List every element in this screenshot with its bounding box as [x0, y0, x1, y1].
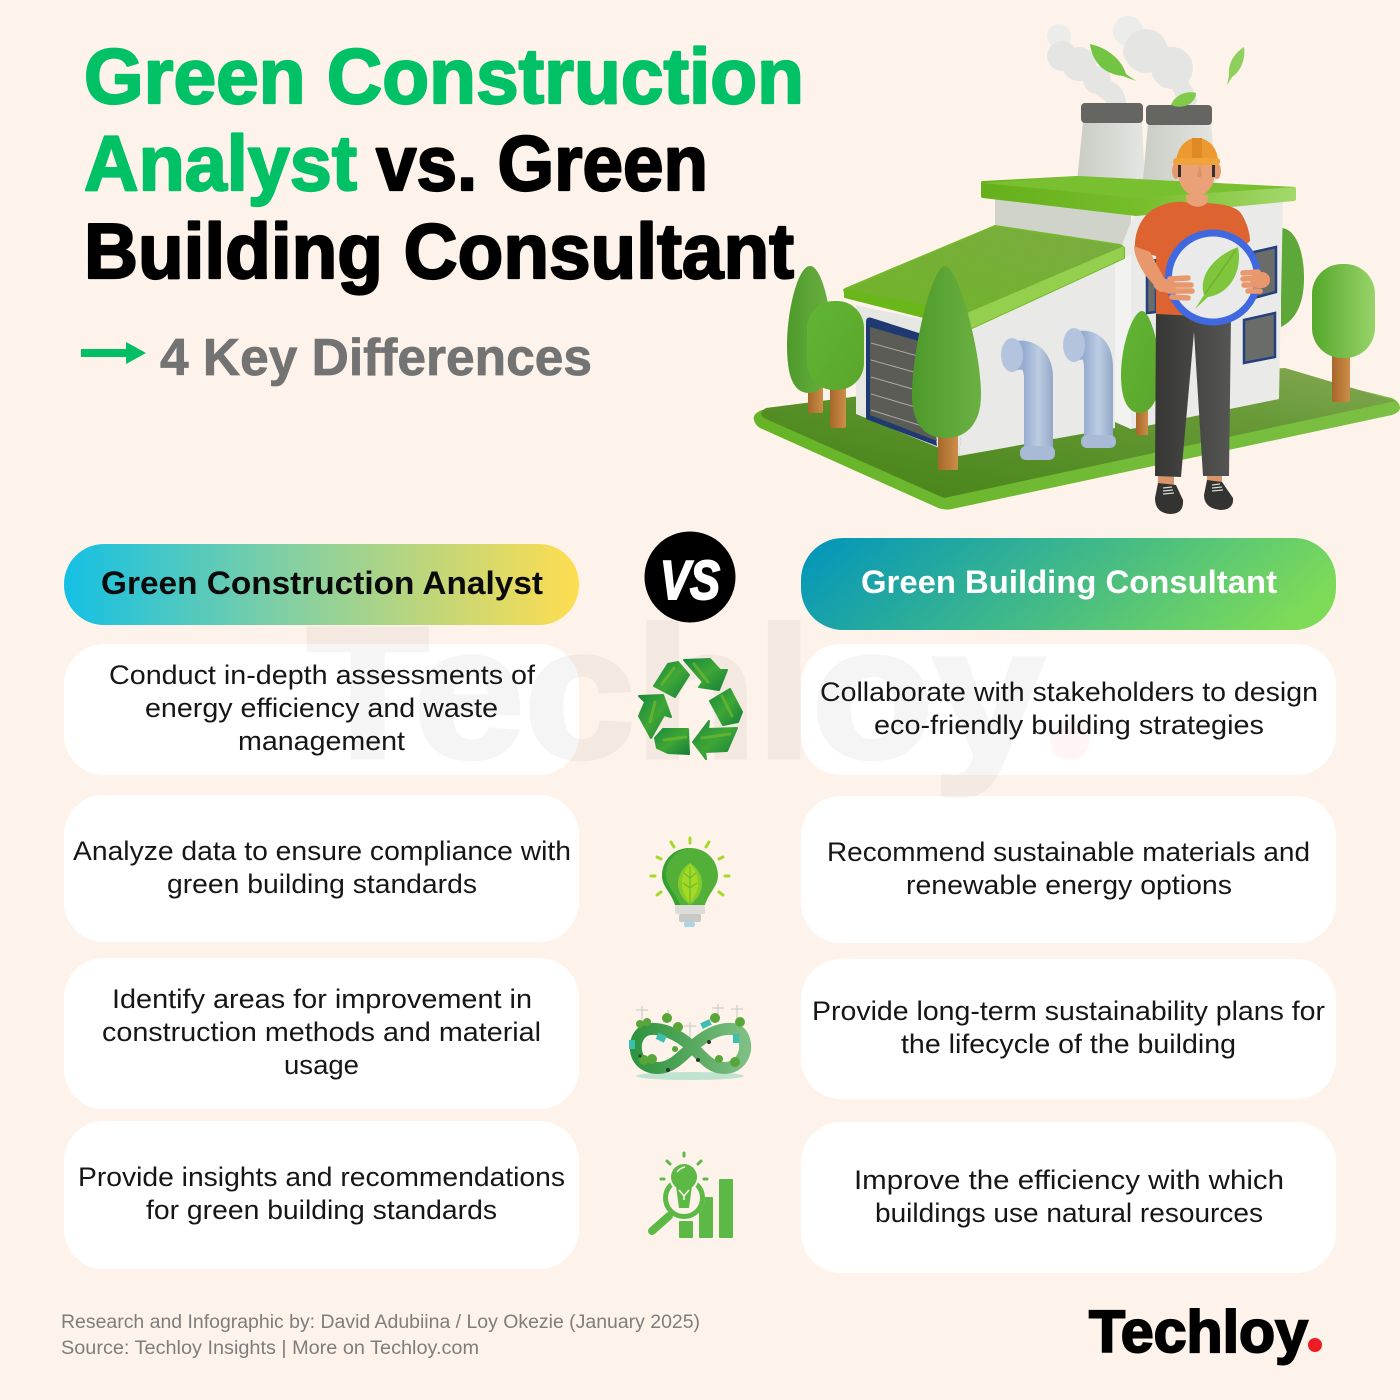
right card 4 text: Improve the efficiency with which — [854, 1165, 1284, 1195]
worker — [1134, 138, 1262, 514]
right card 1 text: Collaborate with stakeholders to design — [820, 677, 1318, 707]
low building — [843, 226, 1124, 456]
vs badge — [644, 532, 736, 622]
ankles — [1158, 474, 1174, 486]
footer credits: Source: Techloy Insights | More on Techloy.com — [61, 1338, 479, 1359]
left card 4 text — [78, 1162, 565, 1225]
trees front — [807, 264, 1375, 470]
left card 4 text: Provide insights and recommendations — [78, 1162, 565, 1192]
left card 1 text: Conduct in-depth assessments of — [109, 660, 536, 690]
icon: green infinity loop — [629, 1004, 745, 1080]
right card 4 text: buildings use natural resources — [875, 1198, 1263, 1228]
left column header: Green Construction Analyst — [101, 565, 543, 601]
title — [84, 32, 804, 295]
right card 4 text — [854, 1165, 1284, 1228]
title: Green Construction — [84, 32, 804, 120]
footer credits — [61, 1312, 700, 1359]
left card 1 text — [109, 660, 536, 756]
left card 4 text: for green building standards — [146, 1195, 497, 1225]
title: Building Consultant — [84, 207, 794, 295]
left card 3 text: Identify areas for improvement in — [112, 984, 532, 1014]
icon: insight chart — [652, 1153, 733, 1238]
garage door — [866, 318, 937, 446]
ground platform — [754, 368, 1400, 510]
right card 2 text: renewable energy options — [906, 870, 1232, 900]
hands — [1160, 272, 1262, 298]
legs — [1155, 312, 1231, 477]
watermark: Techloy — [307, 590, 1044, 797]
left card 1 text: energy efficiency and waste — [145, 693, 498, 723]
vs badge: VS — [660, 549, 720, 611]
head — [1172, 163, 1221, 196]
logo: Techloy — [1089, 1299, 1308, 1365]
left card 2 text: green building standards — [167, 869, 477, 899]
smoke — [1047, 16, 1193, 102]
title: Analyst — [84, 119, 357, 207]
arrow — [81, 342, 146, 364]
left arm — [1134, 246, 1172, 292]
card backgrounds — [64, 644, 1336, 1273]
right card 2 text — [827, 837, 1310, 900]
left card 1 text: management — [238, 726, 406, 756]
left column header — [64, 544, 579, 625]
left card 2 text — [73, 836, 571, 899]
ring with leaf — [1168, 233, 1258, 322]
icon: eco light bulb — [651, 838, 729, 927]
left card 3 text — [102, 984, 541, 1080]
right column header: Green Building Consultant — [861, 564, 1277, 600]
right column header — [801, 538, 1336, 630]
tree back right — [1281, 228, 1304, 327]
right card 3 text — [812, 996, 1325, 1059]
right card 1 text — [820, 677, 1318, 740]
tree back left — [787, 266, 832, 413]
footer credits: Research and Infographic by: David Adubiina / Loy Okezie (January 2025) — [61, 1312, 700, 1333]
helmet — [1173, 138, 1220, 165]
title: vs. Green — [376, 119, 708, 207]
left card 3 text: usage — [284, 1050, 359, 1080]
torso — [1135, 202, 1250, 318]
right card 1 text: eco-friendly building strategies — [874, 710, 1264, 740]
illustration: green factory and worker — [754, 16, 1400, 514]
pipes — [1001, 328, 1116, 460]
subtitle: 4 Key Differences — [160, 329, 592, 387]
chimneys — [1077, 103, 1217, 190]
shoes — [1155, 480, 1233, 514]
leaves — [1090, 44, 1244, 107]
right card 2 text: Recommend sustainable materials and — [827, 837, 1310, 867]
neck — [1186, 195, 1208, 208]
tall building — [982, 176, 1296, 429]
icon: recycle — [639, 659, 742, 759]
left card 3 text: construction methods and material — [102, 1017, 541, 1047]
windows — [1147, 247, 1276, 363]
right card 3 text: the lifecycle of the building — [901, 1029, 1236, 1059]
left card 2 text: Analyze data to ensure compliance with — [73, 836, 571, 866]
right card 3 text: Provide long-term sustainability plans for — [812, 996, 1325, 1026]
